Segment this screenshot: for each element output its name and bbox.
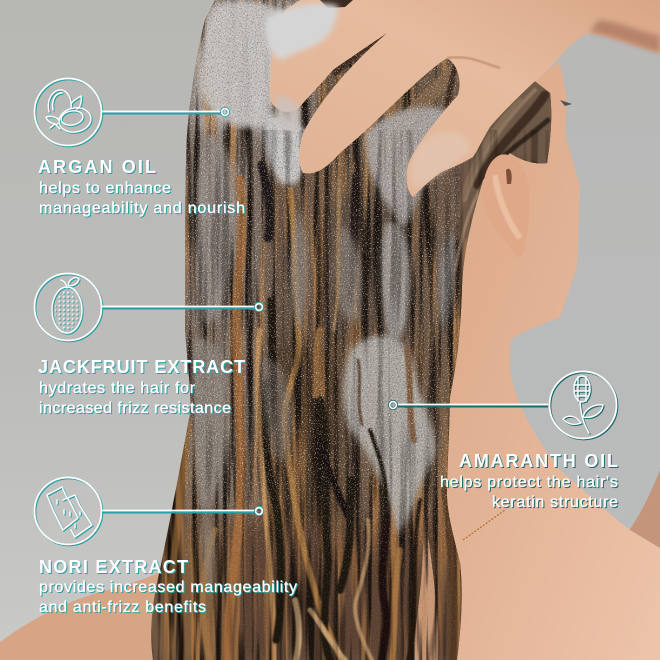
diagonal hair beside the hand	[420, 60, 560, 240]
jackfruit description: increased frizz resistance	[39, 400, 231, 417]
amaranth heading: AMARANTH OIL	[459, 451, 618, 471]
photo: hair mass	[140, 0, 560, 660]
foam patches	[193, 0, 454, 600]
hair peach gaps near neck	[414, 512, 438, 660]
jackfruit description: hydrates the hair for	[39, 380, 196, 397]
jackfruit leader line	[102, 303, 263, 311]
nori description: and anti-frizz benefits	[39, 599, 206, 616]
amaranth leader line	[389, 401, 548, 409]
strand texture	[150, 0, 560, 660]
callout: nori extract	[34, 478, 297, 616]
photo: hand in hair	[265, 0, 660, 197]
amaranth description: helps protect the hair's	[440, 474, 618, 491]
callout: argan oil	[34, 78, 245, 217]
jackfruit icon	[34, 274, 102, 340]
callout: jackfruit extract	[34, 274, 263, 417]
nori icon	[34, 478, 102, 544]
argan oil icon	[34, 78, 102, 146]
foam speckle	[185, 0, 460, 660]
jackfruit heading: JACKFRUIT EXTRACT	[38, 357, 245, 377]
argan oil leader line	[102, 108, 229, 116]
nori leader line	[102, 507, 263, 515]
nori description: provides increased manageability	[39, 579, 297, 596]
argan oil description: helps to enhance	[39, 180, 171, 197]
callout: amaranth oil	[389, 372, 618, 511]
amaranth description: keratin structure	[492, 494, 618, 511]
nori heading: NORI EXTRACT	[39, 557, 188, 577]
argan oil description: manageability and nourish	[39, 200, 245, 217]
argan oil heading: ARGAN OIL	[38, 157, 156, 177]
photo: ear	[483, 154, 529, 257]
amaranth icon	[550, 372, 616, 438]
strands crossing the foam	[150, 130, 560, 660]
